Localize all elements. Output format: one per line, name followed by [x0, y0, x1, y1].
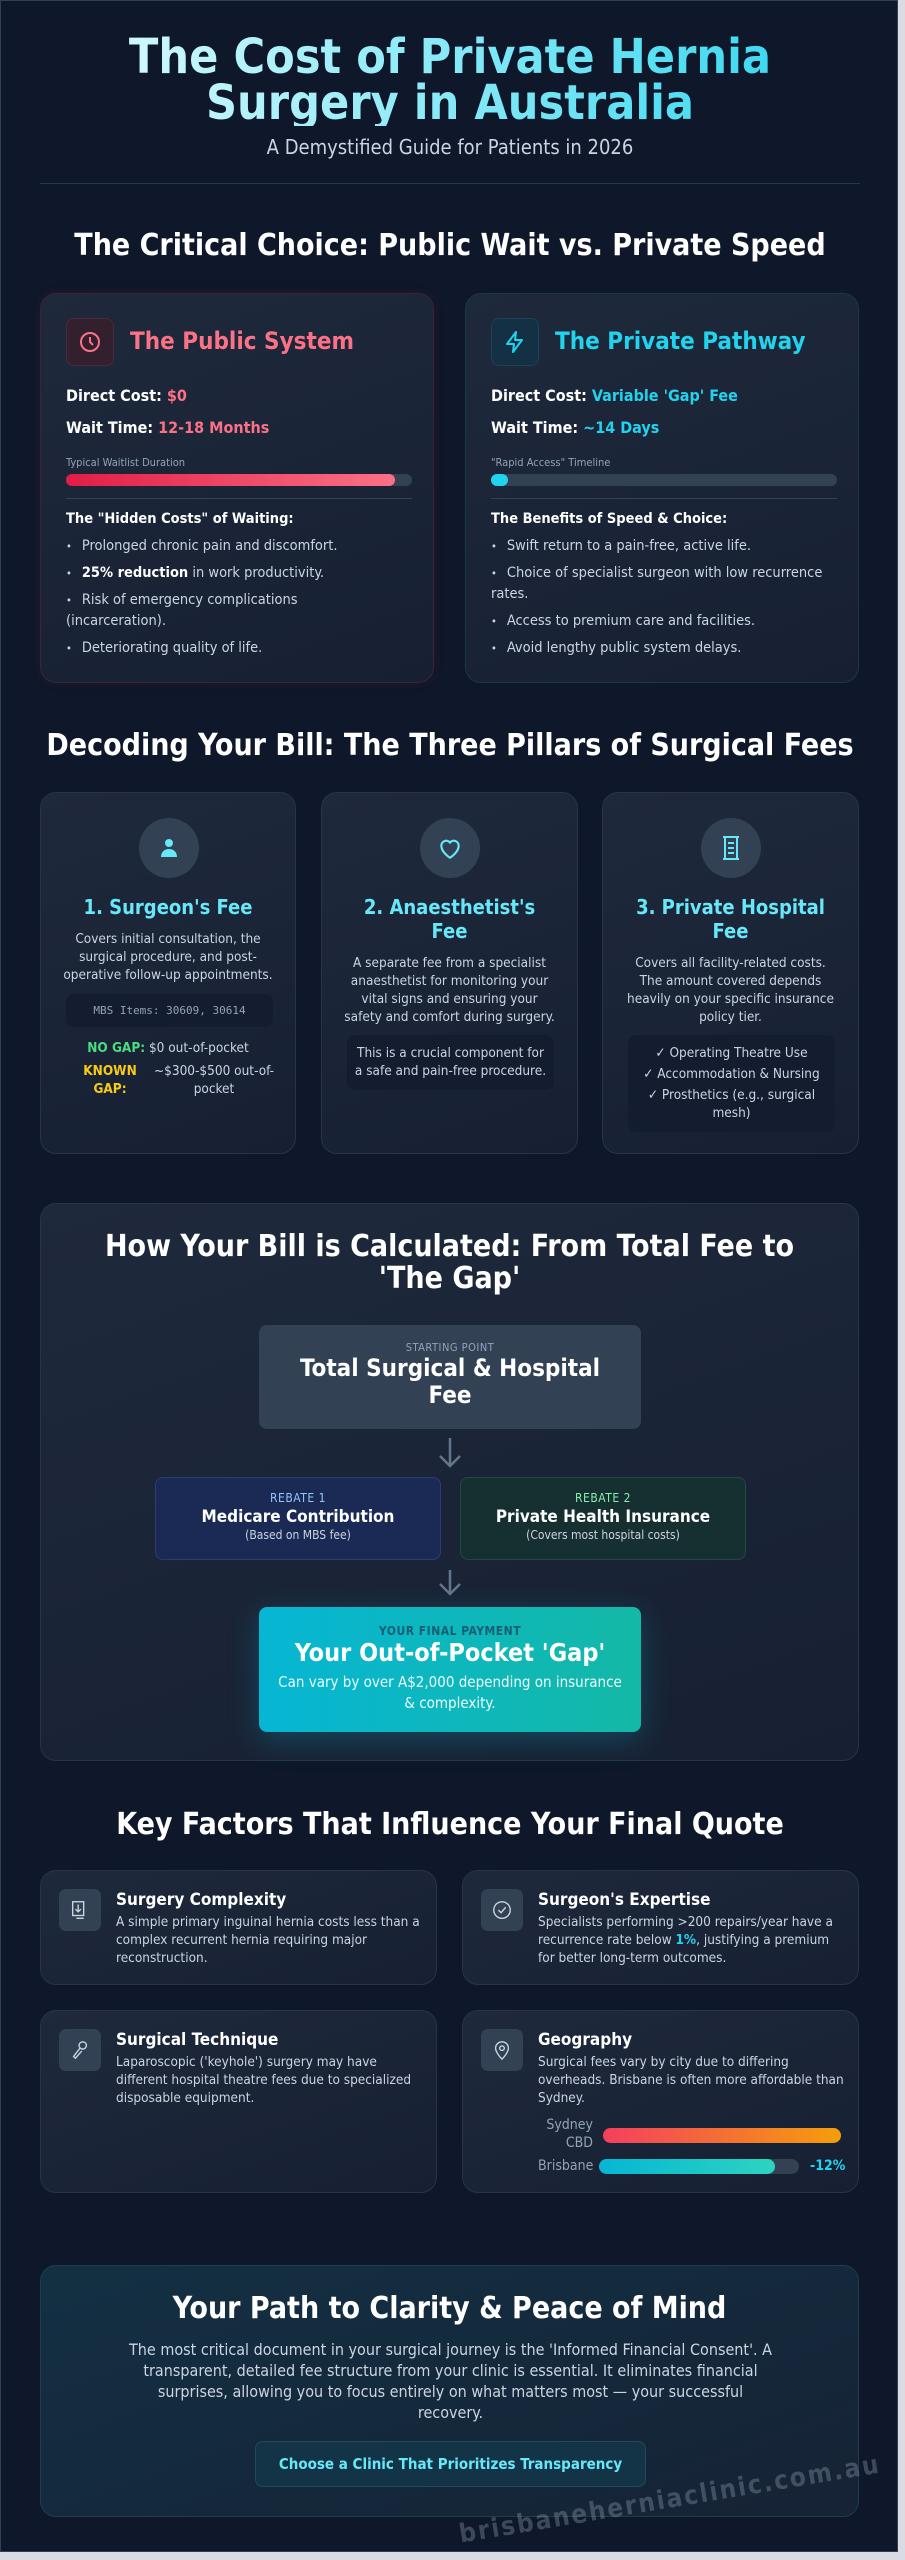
- arrow: [439, 1570, 461, 1596]
- icon: check circle: [481, 1889, 523, 1931]
- watermark: brisbaneherniaclinic.com.au: [457, 2450, 883, 2550]
- icon: pin: [481, 2029, 523, 2071]
- stats: [491, 386, 738, 437]
- icon: person: [139, 818, 199, 878]
- text block: surprises, allowing you to focus entirely on what matters most — your successful: [158, 2382, 743, 2401]
- panel: geography: Surgical fees vary by city due to differing: [538, 2054, 789, 2070]
- box: medicare: [155, 1477, 441, 1560]
- bar chart: city comparison: Brisbane: [538, 2158, 593, 2174]
- note box: This is a crucial component for: [357, 1045, 544, 1061]
- text block: The most critical document in your surgical journey is the 'Informed Financial Consent'. A: [129, 2340, 772, 2359]
- gap info: pocket: [194, 1081, 234, 1097]
- list: hidden costs: Risk of emergency complications (incarceration).: [66, 592, 298, 629]
- box: starting point: [259, 1325, 641, 1429]
- box: insurance: [460, 1477, 746, 1560]
- heading: key factors: Key Factors That Influence Your Final Quote: [116, 1807, 784, 1842]
- list: hidden costs: [66, 511, 338, 656]
- list: hidden costs: 25% reduction in work productivity.: [82, 565, 324, 581]
- list: benefits: The Benefits of Speed & Choice:: [491, 511, 727, 527]
- panel: public system: [40, 293, 434, 683]
- description: Covers all facility-related costs. The amount covered depends heavily on your specific insurance policy tier.: [627, 955, 834, 1025]
- title: Surgery in Australia: [206, 75, 694, 131]
- box: final gap: [259, 1607, 641, 1732]
- text block: [128, 2340, 772, 2422]
- description: A separate fee from a specialist anaesthetist for monitoring your vital signs and ensuring your safety and comfort during surgery.: [344, 955, 555, 1025]
- list: hidden costs: Deteriorating quality of life.: [82, 640, 262, 656]
- heading: critical choice: The Critical Choice: Public Wait vs. Private Speed: [74, 228, 826, 263]
- box: medicare: (Based on MBS fee): [245, 1528, 351, 1542]
- icon: instrument: [59, 2029, 101, 2071]
- gap info: [83, 1040, 274, 1097]
- box: medicare: Medicare Contribution: [202, 1507, 394, 1527]
- pillar title: [364, 895, 535, 943]
- list: benefits: [491, 511, 822, 656]
- arrow: [439, 1438, 461, 1468]
- box: final gap: Your Out-of-Pocket 'Gap': [295, 1638, 605, 1667]
- box: final gap: Can vary by over A$2,000 depending on insurance & complexity.: [278, 1673, 622, 1712]
- panel: surgery complexity: A simple primary inguinal hernia costs less than a: [116, 1914, 420, 1930]
- checklist: ✓ Operating Theatre Use: [655, 1045, 808, 1061]
- panel: surgeon's fee: [40, 792, 296, 1154]
- box: insurance: (Covers most hospital costs): [526, 1528, 680, 1542]
- list: hidden costs: The "Hidden Costs" of Waiting:: [66, 511, 294, 527]
- gap info: KNOWN GAP:: [83, 1063, 137, 1097]
- panel: surgical technique: disposable equipment.: [116, 2090, 254, 2106]
- icon: lightning: [491, 318, 539, 366]
- panel: geography: [462, 2010, 859, 2193]
- panel: hospital fee: [602, 792, 859, 1154]
- heading: three pillars: Decoding Your Bill: The Three Pillars of Surgical Fees: [46, 728, 854, 763]
- text block: recovery.: [418, 2403, 483, 2422]
- panel: surgery complexity: reconstruction.: [116, 1950, 208, 1966]
- pillar title: Fee: [432, 919, 467, 943]
- bar: waitlist: Typical Waitlist Duration: [66, 456, 185, 469]
- stats: Direct Cost: Variable 'Gap' Fee: [491, 386, 738, 405]
- panel: anaesthetist's fee: [321, 792, 578, 1154]
- MBS box: MBS Items: 30609, 30614: [93, 1004, 246, 1017]
- panel: surgeon's expertise: for better long-term outcomes.: [538, 1950, 726, 1966]
- pillar title: 2. Anaesthetist's: [364, 895, 535, 919]
- text block: transparent, detailed fee structure from your clinic is essential. It eliminates financial: [143, 2361, 758, 2380]
- title: The Cost of Private Hernia: [129, 29, 771, 85]
- panel: geography: Sydney.: [538, 2090, 585, 2106]
- bar chart: city comparison: [538, 2117, 845, 2174]
- icon: monitor: [59, 1889, 101, 1931]
- bar chart: city comparison: CBD: [566, 2135, 593, 2151]
- panel: surgeon's expertise: Specialists performing >200 repairs/year have a: [538, 1914, 833, 1930]
- list: benefits: Choice of specialist surgeon with low recurrence rates.: [491, 565, 822, 602]
- button: Choose a Clinic That Prioritizes Transparency: [279, 2455, 622, 2473]
- panel: conclusion: [40, 2265, 859, 2517]
- button: [255, 2441, 646, 2487]
- panel: surgical technique: Surgical Technique: [116, 2030, 278, 2050]
- box: insurance: REBATE 2: [575, 1491, 631, 1505]
- panel: surgeon's expertise: Surgeon's Expertise: [538, 1890, 710, 1910]
- MBS box: [66, 994, 273, 1027]
- box: medicare: REBATE 1: [270, 1491, 326, 1505]
- panel: bill calculation: [40, 1203, 859, 1761]
- heading: How Your Bill is Calculated: From Total Fee to: [105, 1229, 794, 1264]
- card title: The Private Pathway: [555, 327, 806, 355]
- box: starting point: Fee: [428, 1381, 472, 1409]
- icon: document: [701, 818, 761, 878]
- gap info: ~$300-$500 out-of-: [154, 1063, 274, 1079]
- list: hidden costs: Prolonged chronic pain and discomfort.: [82, 538, 338, 554]
- bar chart: city comparison: -12%: [810, 2158, 845, 2174]
- list: benefits: Avoid lengthy public system delays.: [507, 640, 741, 656]
- subtitle: A Demystified Guide for Patients in 2026: [267, 135, 633, 159]
- bar: rapid access: "Rapid Access" Timeline: [491, 456, 610, 469]
- panel: surgical technique: [40, 2010, 437, 2193]
- panel: geography: Geography: [538, 2030, 632, 2050]
- box: starting point: Total Surgical & Hospital: [300, 1354, 600, 1382]
- note box: a safe and pain-free procedure.: [355, 1063, 546, 1079]
- panel: surgeon's expertise: [462, 1870, 859, 1985]
- panel: surgery complexity: complex recurrent hernia requiring major: [116, 1932, 367, 1948]
- bar: rapid access: [491, 456, 837, 486]
- bar chart: city comparison: Sydney: [546, 2117, 593, 2133]
- panel: surgery complexity: [40, 1870, 437, 1985]
- stats: Direct Cost: $0: [66, 386, 187, 405]
- box: starting point: STARTING POINT: [406, 1341, 494, 1354]
- panel: surgical technique: Laparoscopic ('keyhole') surgery may have: [116, 2054, 377, 2070]
- stats: [66, 386, 269, 437]
- panel: surgery complexity: Surgery Complexity: [116, 1890, 286, 1910]
- stats: Wait Time: 12-18 Months: [66, 418, 269, 437]
- pillar title: Fee: [713, 919, 748, 943]
- pillar title: 3. Private Hospital: [636, 895, 825, 919]
- pillar title: 1. Surgeon's Fee: [84, 895, 252, 919]
- list: benefits: Access to premium care and facilities.: [507, 613, 755, 629]
- panel: private pathway: [465, 293, 859, 683]
- panel: surgical technique: different hospital theatre fees due to specialized: [116, 2072, 411, 2088]
- checklist: ✓ Accommodation & Nursing: [643, 1066, 820, 1082]
- heading: 'The Gap': [379, 1261, 520, 1296]
- pillar title: [636, 895, 825, 943]
- box: final gap: YOUR FINAL PAYMENT: [379, 1624, 521, 1638]
- icon: clock: [66, 318, 114, 366]
- icon: heart: [420, 818, 480, 878]
- card title: The Public System: [130, 327, 354, 355]
- title: [1, 34, 899, 126]
- box: insurance: Private Health Insurance: [496, 1507, 710, 1527]
- checklist: [628, 1035, 835, 1132]
- checklist: ✓ Prosthetics (e.g., surgical mesh): [648, 1087, 815, 1121]
- bar: waitlist: [66, 456, 412, 486]
- heading: [105, 1229, 794, 1296]
- note box: [347, 1035, 554, 1090]
- panel: geography: overheads. Brisbane is often more affordable than: [538, 2072, 844, 2088]
- panel: surgeon's expertise: recurrence rate below 1%, justifying a premium: [538, 1932, 829, 1948]
- heading: Your Path to Clarity & Peace of Mind: [173, 2291, 726, 2326]
- list: benefits: Swift return to a pain-free, active life.: [507, 538, 751, 554]
- stats: Wait Time: ~14 Days: [491, 418, 659, 437]
- gap info: NO GAP: $0 out-of-pocket: [87, 1040, 249, 1056]
- description: Covers initial consultation, the surgical procedure, and post-operative follow-up appointments.: [63, 931, 273, 983]
